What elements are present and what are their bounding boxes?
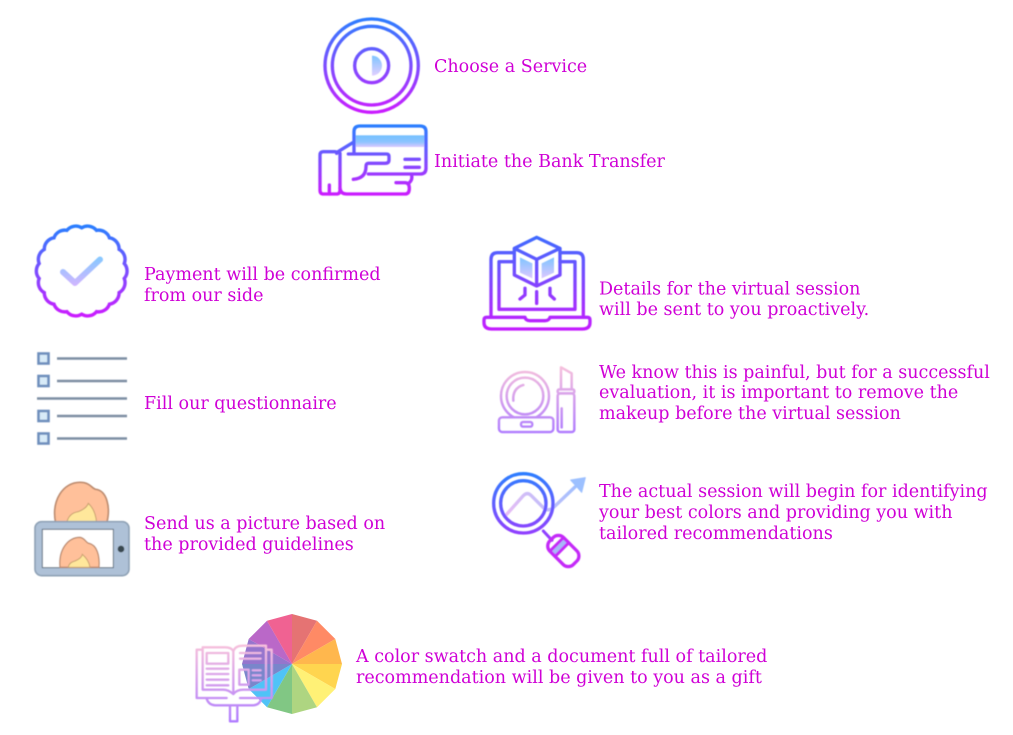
- icon: confirmed badge: [36, 226, 127, 316]
- step label: send a picture: Send us a picture based on: [144, 514, 385, 534]
- icon: choose a service dial: [325, 19, 418, 112]
- step label: virtual session details: Details for the virtual session: [599, 279, 860, 299]
- step label: remove makeup: evaluation, it is important to remove the: [599, 383, 958, 403]
- step label: initiate the bank transfer: Initiate the Bank Transfer: [434, 152, 666, 172]
- step label: fill questionnaire: Fill our questionnaire: [144, 394, 337, 414]
- icon: compact and lipstick: [499, 367, 574, 432]
- icon: magnifier with trend arrow: [494, 474, 585, 570]
- step label: gift swatch and document: recommendation will be given to you as a gift: [356, 668, 762, 688]
- icon: hand holding bank card: [320, 126, 426, 194]
- icon: laptop with box: [484, 237, 590, 329]
- step label: send a picture: the provided guidelines: [144, 535, 354, 555]
- step label: actual session: your best colors and providing you with: [598, 503, 952, 523]
- icon: selfie on phone: [35, 482, 129, 576]
- step label: virtual session details: will be sent to you proactively.: [599, 300, 869, 320]
- step label: gift swatch and document: A color swatch and a document full of tailored: [356, 647, 767, 667]
- open book on stand: [197, 646, 272, 721]
- step label: payment confirmed: from our side: [144, 286, 264, 306]
- step label: choose a service: Choose a Service: [434, 57, 587, 77]
- step label: payment confirmed: Payment will be confirmed: [144, 265, 381, 285]
- icon: questionnaire checklist: [37, 354, 127, 444]
- step label: actual session: The actual session will begin for identifying: [599, 482, 988, 502]
- step label: remove makeup: We know this is painful, but for a successful: [599, 363, 990, 383]
- icon: colour wheel and open book: [197, 614, 342, 721]
- step label: remove makeup: makeup before the virtual session: [599, 404, 901, 424]
- colour swatch wheel: [242, 614, 342, 714]
- step label: actual session: tailored recommendations: [599, 524, 833, 544]
